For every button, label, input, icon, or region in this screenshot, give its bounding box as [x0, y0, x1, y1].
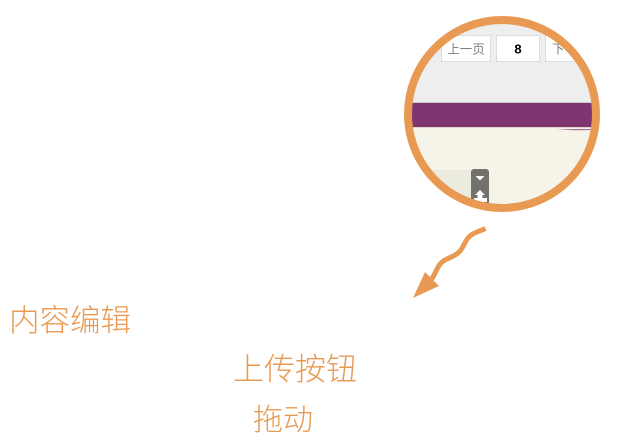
pager button: next: 下一页: [552, 42, 590, 56]
toolbar with drag and upload icons: [471, 169, 489, 203]
pager current page: [496, 36, 540, 62]
pager button: previous: 上一页: [447, 42, 485, 56]
label: drag: 拖动: [253, 404, 313, 437]
pager current page: 8: [514, 42, 522, 56]
label: content editing: 内容编辑: [9, 304, 131, 338]
wavy arrow pointing down-left: [413, 228, 486, 298]
pager button: next: [545, 35, 576, 62]
pager button: previous: [442, 36, 490, 62]
label: upload button: 上传按钮: [233, 352, 357, 387]
magnified circle callout: [404, 16, 600, 214]
